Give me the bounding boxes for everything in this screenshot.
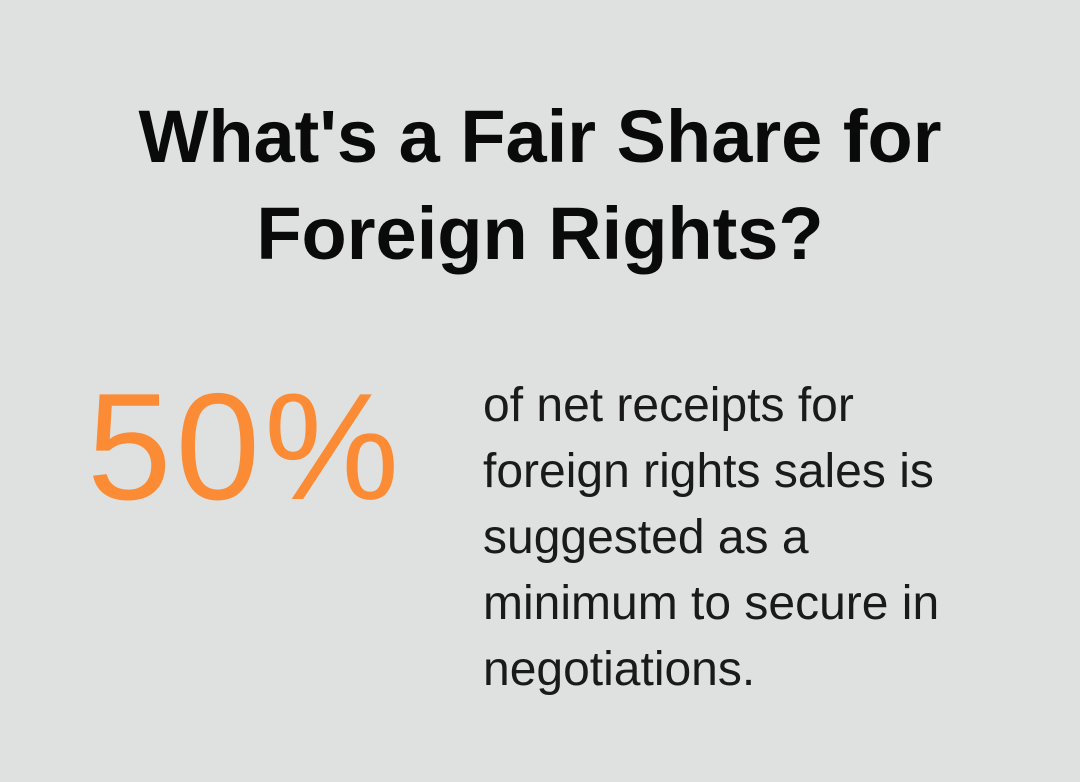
- description text: of net receipts for: [483, 379, 854, 432]
- title: [138, 95, 942, 275]
- title: What's a Fair Share for: [138, 95, 942, 178]
- description text: foreign rights sales is: [483, 445, 934, 498]
- description text: suggested as a: [483, 511, 809, 564]
- description text: minimum to secure in: [483, 577, 939, 630]
- big stat: 50%: [87, 362, 403, 532]
- description text: [483, 379, 939, 696]
- description text: negotiations.: [483, 643, 755, 696]
- title: Foreign Rights?: [256, 192, 824, 275]
